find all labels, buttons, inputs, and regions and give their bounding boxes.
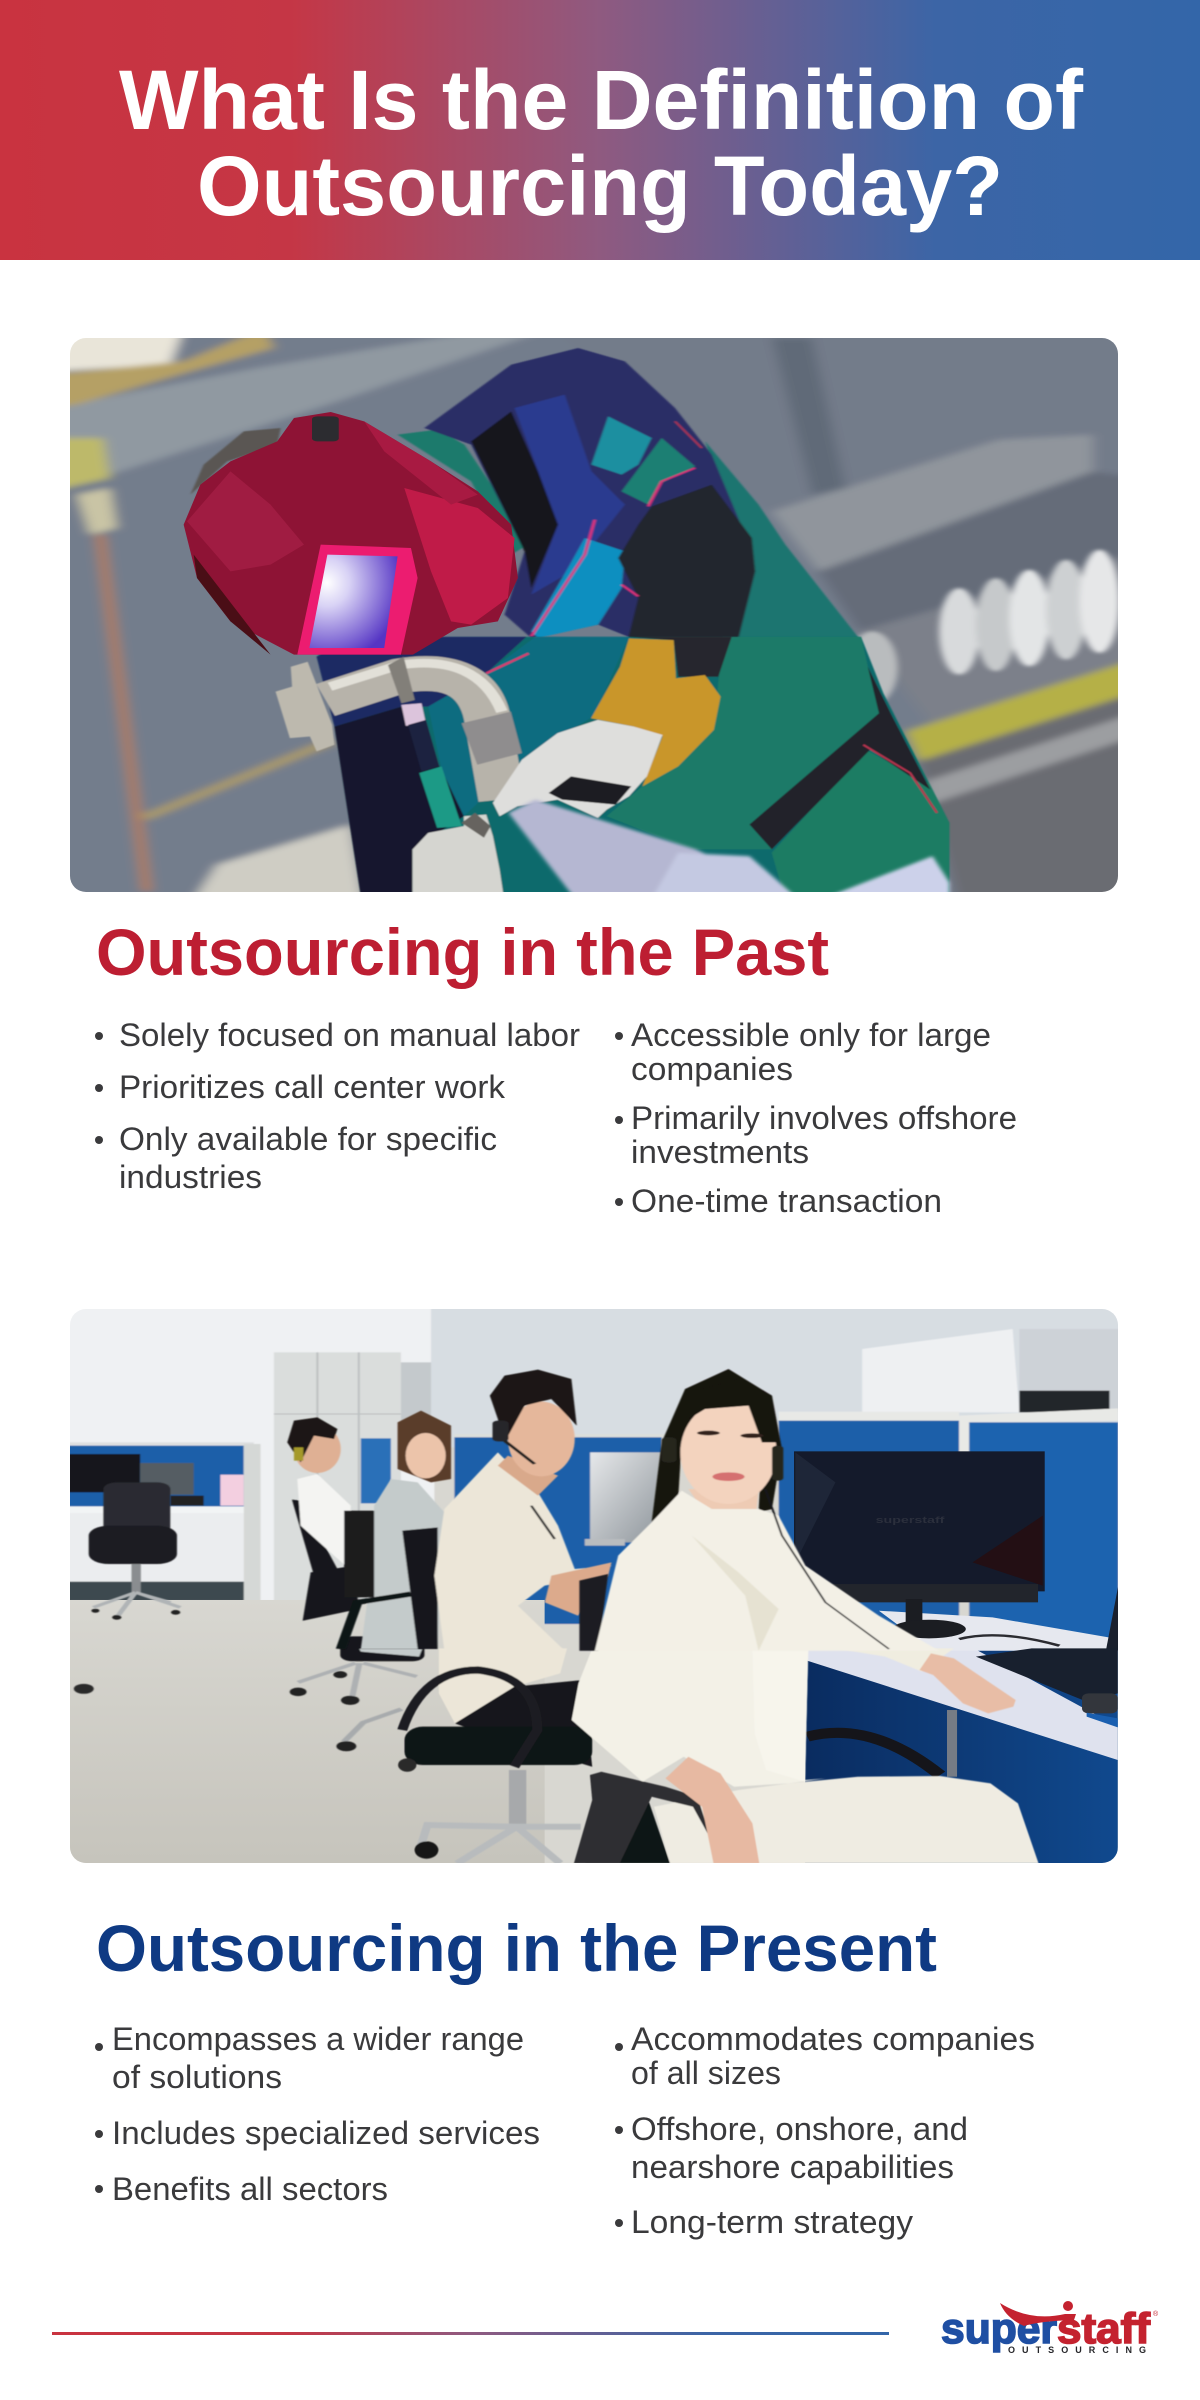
work glove bbox=[493, 720, 662, 818]
woman in front with headset bbox=[579, 1369, 939, 1651]
floor bbox=[70, 1600, 545, 1863]
section heading: Outsourcing in the Past: Outsourcing in the Past bbox=[96, 915, 829, 989]
black monitor and desk top: superstaff bbox=[876, 1515, 945, 1526]
bullet list: past, left column: Solely focused on manual labor bbox=[119, 1017, 580, 1053]
lower chair, trousers and woman's lap bbox=[398, 1648, 1039, 1863]
empty chair at the left desk bbox=[89, 1482, 180, 1620]
logo: SuperStaff Outsourcing: ® bbox=[1153, 2310, 1159, 2318]
bullet list: past, left column bbox=[95, 1017, 580, 1195]
logo: SuperStaff Outsourcing: super bbox=[941, 2305, 1057, 2353]
bullet list: past, right column: Primarily involves offshore bbox=[631, 1100, 1017, 1136]
title banner: Outsourcing Today? bbox=[197, 139, 1003, 233]
jacket and torso bbox=[398, 348, 859, 638]
logo: SuperStaff Outsourcing: OUTSOURCING bbox=[1008, 2345, 1146, 2355]
photo: welder working on a steel pipe bbox=[70, 338, 1118, 892]
lower body, pipe and gloves bbox=[276, 637, 949, 899]
bullet list: past, right column: Accessible only for large bbox=[631, 1017, 991, 1053]
bullet list: past, right column bbox=[615, 1017, 1017, 1219]
welding helmet bbox=[184, 412, 518, 655]
floor chair bases bbox=[74, 1636, 424, 1751]
bullet list: present, right column: of all sizes bbox=[631, 2055, 781, 2091]
bullet list: past, left column: industries bbox=[119, 1159, 262, 1195]
steel elbow bbox=[326, 674, 502, 800]
bullet list: present, right column: nearshore capabilities bbox=[631, 2149, 954, 2185]
bullet list: past, left column: Only available for specific bbox=[119, 1121, 497, 1157]
photo: call center agents wearing headsets bbox=[70, 1309, 1118, 1863]
logo: SuperStaff Outsourcing: staff bbox=[1057, 2305, 1151, 2353]
logo: SuperStaff Outsourcing bbox=[941, 2301, 1159, 2355]
black monitor and desk top bbox=[794, 1451, 1118, 1651]
bullet list: present, left column: Encompasses a wider range bbox=[112, 2021, 524, 2057]
bullet list: past, right column: One-time transaction bbox=[631, 1183, 942, 1219]
bullet list: present, right column: Long-term strategy bbox=[631, 2204, 913, 2240]
blurred foreground pipe bbox=[509, 800, 949, 899]
blurred factory background bbox=[50, 328, 1140, 905]
laptop on desk bbox=[976, 1648, 1118, 1727]
bullet list: present, left column: Benefits all sectors bbox=[112, 2171, 388, 2207]
bullet list: present, right column bbox=[615, 2021, 1035, 2240]
yellow cuff bbox=[591, 638, 721, 786]
bullet list: present, left column bbox=[95, 2021, 540, 2207]
office room background bbox=[67, 1307, 1123, 1867]
coiled steel rings bbox=[817, 550, 1120, 708]
bullet list: present, left column: of solutions bbox=[112, 2059, 282, 2095]
title banner: What Is the Definition of bbox=[119, 53, 1084, 147]
colleagues bbox=[287, 1370, 612, 1651]
bullet list: past, right column: investments bbox=[631, 1134, 809, 1170]
footer gradient rule bbox=[52, 2332, 889, 2335]
section heading: Outsourcing in the Present: Outsourcing in the Present bbox=[96, 1911, 937, 1985]
bullet list: present, left column: Includes specialized services bbox=[112, 2115, 540, 2151]
bullet list: present, right column: Offshore, onshore, and bbox=[631, 2111, 968, 2147]
under-desk blue panel bbox=[805, 1650, 1118, 1863]
bullet list: past, right column: companies bbox=[631, 1051, 793, 1087]
bullet list: past, left column: Prioritizes call center work bbox=[119, 1069, 506, 1105]
bullet list: present, right column: Accommodates companies bbox=[631, 2021, 1035, 2057]
title banner bbox=[0, 0, 1200, 260]
